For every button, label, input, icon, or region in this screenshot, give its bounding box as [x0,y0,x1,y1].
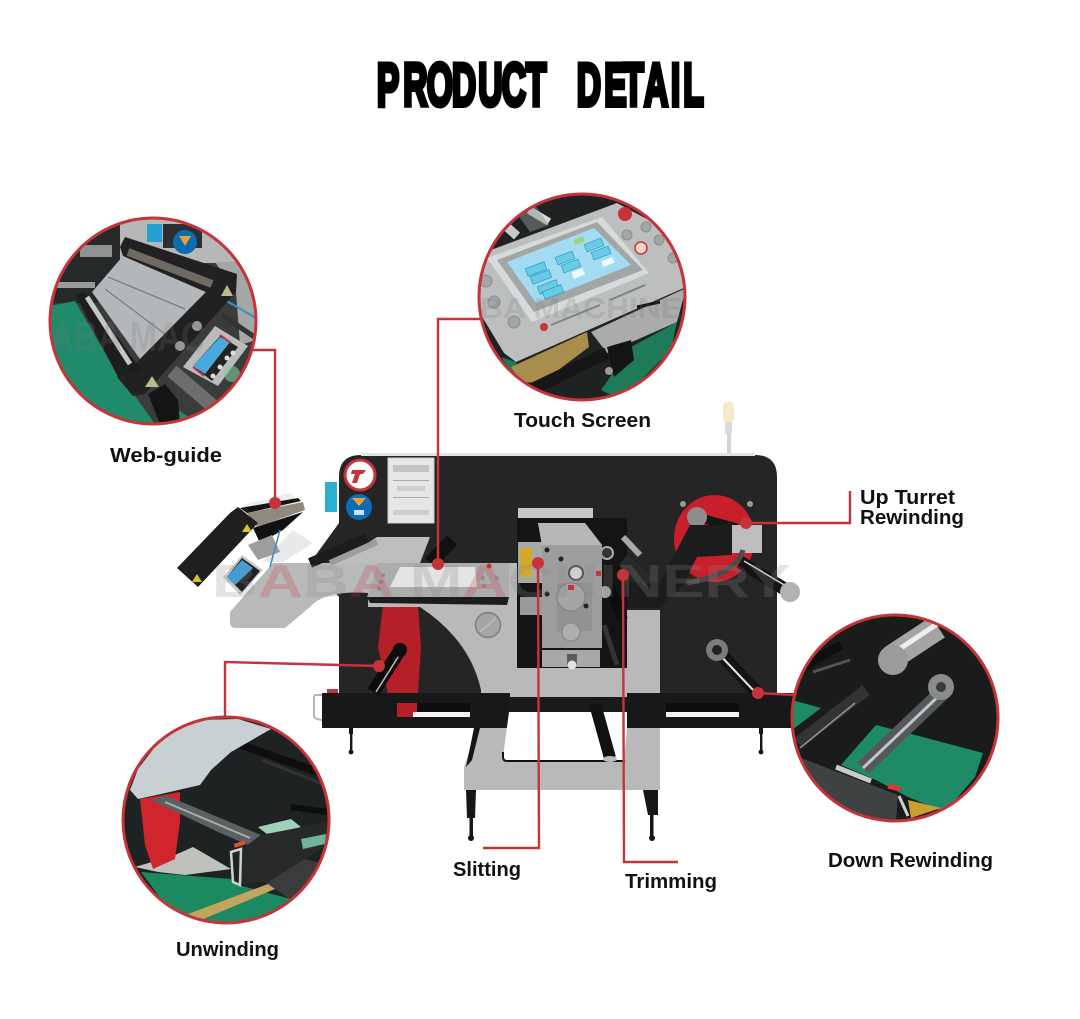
circle ring [123,717,329,923]
slitting left block [518,542,542,583]
recess top cover [518,508,593,518]
turret arm [627,525,732,608]
detail circle: down rewinding [792,614,1000,822]
callout dot: up turret rewinding [740,517,752,529]
label: down rewinding: Down Rewinding [828,850,993,872]
label: trimming: Trimming [625,871,717,893]
dancer roller [595,704,617,762]
detail circle: web-guide [50,218,256,424]
top edge highlight [361,453,755,456]
callout line: web-guide [247,350,275,503]
circle ring [479,194,685,400]
label: up turret rewinding [860,487,964,529]
right cross bar [627,693,795,728]
callout line: unwinding [225,662,379,718]
label: unwinding: Unwinding [176,939,279,961]
label: up turret rewinding: Up Turret [860,487,955,509]
detail circle: unwinding [123,717,329,924]
label: slitting: Slitting [453,859,521,881]
callout line: touch screen [438,319,480,563]
circle ring [50,218,256,424]
turret bolts [680,501,753,507]
callout dot: touch screen [432,558,444,570]
black strut [466,728,480,767]
detail circle: touch screen [478,194,686,402]
callout dot: trimming [617,569,629,581]
lower rewinding roller [706,639,757,692]
label: touch screen: Touch Screen [514,410,651,432]
main black panel [310,455,777,712]
yellow safety label [520,548,532,577]
callout line: down rewinding [758,693,794,695]
slitting unit [538,523,602,648]
detail circle: touch screen: BA MACHINE [480,293,682,325]
callout line: trimming [623,575,678,862]
lower stand [464,728,660,790]
title: PRODUCT DETAIL [377,52,704,119]
upper rewinding roller [740,561,800,602]
central recess [517,518,627,668]
web path tray [337,537,430,563]
callout line: slitting [483,563,539,848]
stand window [503,712,627,762]
machine illustration [177,402,800,841]
left cross bar [314,689,510,728]
data sheet [388,458,434,523]
callout dot: down rewinding [752,687,764,699]
slitting base block [542,650,600,670]
callout dot: web-guide [269,497,281,509]
turret flange [687,507,707,527]
logo badge [345,460,375,490]
web guide assembly [177,493,313,595]
detail circle: web-guide: ABA MAC [50,313,205,360]
slitting lower left block [520,597,542,615]
rollers behind unit [599,537,650,665]
watermark: B A B A M A CHINERY [212,555,790,607]
circle ring [792,615,998,821]
upper red turret disc [674,495,755,582]
recess band [509,697,627,712]
turret cable [687,550,743,583]
callout line: up turret rewinding [746,491,850,523]
lower red unwinding disc [378,605,421,693]
control panel [367,563,509,605]
label: web-guide: Web-guide [110,445,222,467]
unwinding shaft [373,643,407,692]
stand inner edge [503,752,625,761]
certification badge [346,494,372,520]
feed rollers [310,538,377,563]
turret shaft [697,517,737,528]
frame plate round [476,612,500,638]
black idle roller [430,540,452,563]
callout dot: slitting [532,557,544,569]
teal tag [325,482,337,512]
machine legs [349,728,763,841]
light tower [723,402,734,456]
turret motor [732,525,762,553]
label: up turret rewinding: Rewinding [860,507,964,529]
callout dot: unwinding [373,660,385,672]
grey side frame [230,563,660,697]
